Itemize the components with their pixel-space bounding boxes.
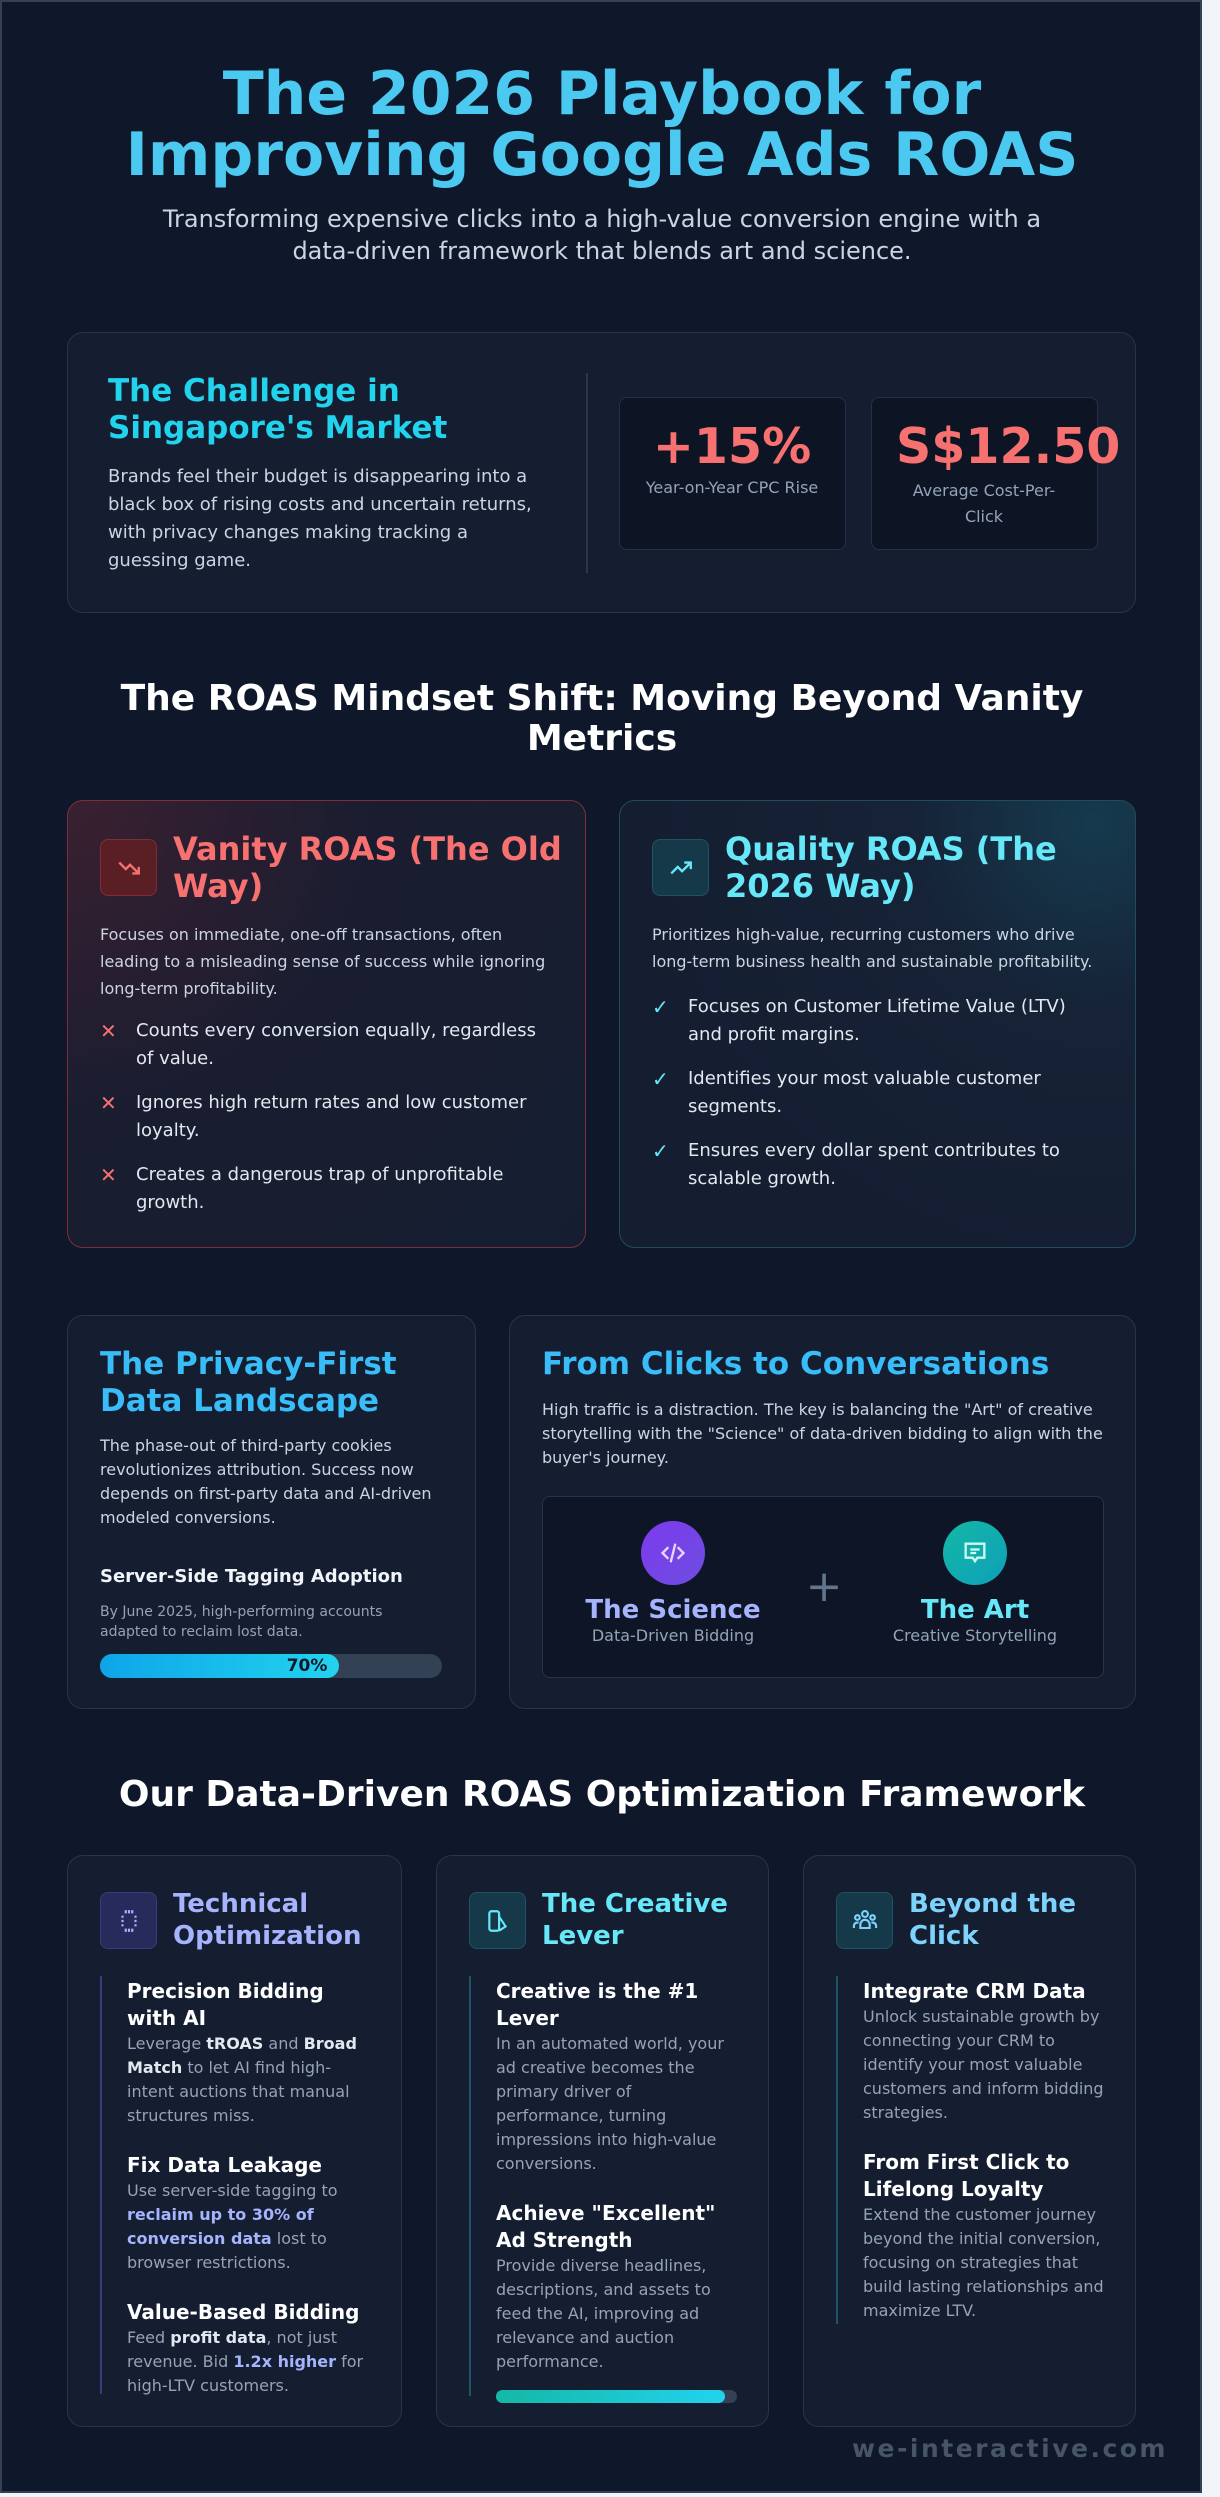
technical items: Feed profit data, not just revenue. Bid 1.2x higher for high-LTV customers. [127,2328,363,2395]
title: The 2026 Playbook for [223,59,981,129]
stat: CPC rise: +15% [653,418,811,475]
quality heading: Quality ROAS (The 2026 Way) [725,830,1057,905]
technical items: Leverage tROAS and Broad Match to let AI find high-intent auctions that manual structures miss. [127,2034,357,2125]
clicks heading: From Clicks to Conversations [542,1346,1049,1382]
quality bullets: Identifies your most valuable customer segments. [688,1068,1041,1117]
panel: beyond the click [803,1855,1136,2427]
quality description: Prioritizes high-value, recurring customers who drive long-term business health and sustainable profitability. [652,925,1092,971]
panel: privacy-first data [67,1315,476,1709]
ad strength bar [496,2390,737,2403]
panel: creative lever [436,1855,769,2427]
beyond items: Extend the customer journey beyond the initial conversion, focusing on strategies that build lasting relationships and maximize LTV. [863,2205,1104,2320]
panel: clicks to conversations [509,1315,1136,1709]
panel: vanity ROAS [67,800,586,1248]
beyond items: Integrate CRM Data [863,1979,1086,2003]
icon: trend up [652,839,709,896]
technical heading: Optimization [173,1921,361,1951]
section heading: framework: Our Data-Driven ROAS Optimization Framework [119,1774,1085,1815]
creative heading [542,1889,728,1951]
section heading: mindset shift [120,678,1083,759]
creative heading: The Creative [542,1889,728,1919]
beyond heading [909,1889,1076,1951]
section heading: mindset shift: The ROAS Mindset Shift: Moving Beyond Vanity [121,678,1083,719]
vanity description: Focuses on immediate, one-off transactions, often leading to a misleading sense of success while ignoring long-term profitability. [100,925,545,998]
science [585,1521,761,1645]
server-side tagging heading: Server-Side Tagging Adoption [100,1566,403,1587]
footer brand: we-interactive.com [852,2434,1168,2463]
icon: people [836,1892,893,1949]
privacy heading: The Privacy-First [100,1346,397,1382]
icon: creative [469,1892,526,1949]
icon: trend down [100,839,157,896]
quality bullets: ✓ [652,1067,669,1091]
vanity bullets: Creates a dangerous trap of unprofitable growth. [136,1164,503,1213]
subtitle: Transforming expensive clicks into a high-value conversion engine with a [163,205,1041,233]
technical items: Value-Based Bidding [127,2300,359,2324]
creative items: Provide diverse headlines, descriptions, and assets to feed the AI, improving ad relevance and auction performance. [496,2256,711,2371]
panel: technical optimization [67,1855,402,2427]
challenge heading: The Challenge in [108,373,400,409]
technical items: Use server-side tagging to reclaim up to 30% of conversion data lost to browser restrictions. [127,2181,338,2272]
science: Data-Driven Bidding [592,1626,754,1645]
quality bullets [652,995,1066,1189]
vanity bullets: ✕ [100,1019,117,1043]
progress bar 70%: 70% [287,1656,327,1676]
server-side note: By June 2025, high-performing accounts adapted to reclaim lost data. [100,1604,382,1640]
icon: code [641,1521,705,1585]
icon: chip [100,1892,157,1949]
panel: challenge [67,332,1136,613]
title: Improving Google Ads ROAS [126,120,1078,190]
technical items: Fix Data Leakage [127,2153,322,2177]
technical heading: Technical [173,1889,308,1919]
section heading: mindset shift: Metrics [527,718,677,759]
quality bullets: Focuses on Customer Lifetime Value (LTV) and profit margins. [688,996,1066,1045]
clicks text: High traffic is a distraction. The key is balancing the "Art" of creative storytelling with the "Science" of data-driven bidding to align with the buyer's journey. [542,1400,1103,1467]
stat: CPC rise: Year-on-Year CPC Rise [646,478,818,497]
stat: average CPC: Average Cost-Per-Click [913,481,1055,526]
beyond items: From First Click to Lifelong Loyalty [863,2150,1069,2201]
beyond heading: Click [909,1921,979,1951]
title [126,59,1078,190]
vanity bullets: ✕ [100,1091,117,1115]
stat: average CPC [871,397,1098,550]
vanity bullets: ✕ [100,1163,117,1187]
panel: quality ROAS [619,800,1136,1248]
privacy text: The phase-out of third-party cookies revolutionizes attribution. Success now depends on first-party data and AI-driven modeled conversions. [100,1436,432,1527]
science: The Science [585,1595,761,1625]
creative items: In an automated world, your ad creative becomes the primary driver of performance, turning impressions into high-value conversions. [496,2034,724,2173]
challenge text: Brands feel their budget is disappearing into a black box of rising costs and uncertain returns, with privacy changes making tracking a guessing game. [108,466,532,571]
stat: CPC rise [619,397,846,550]
quality bullets: ✓ [652,995,669,1019]
technical items: Precision Bidding with AI [127,1979,324,2030]
creative items: Creative is the #1 Lever [496,1979,698,2030]
stat: average CPC: S$12.50 [896,418,1120,475]
technical items [100,1976,370,2394]
plus sign: + [806,1561,842,1612]
art: The Art [921,1595,1029,1625]
technical heading [173,1889,361,1951]
vanity heading: Vanity ROAS (The Old Way) [173,830,562,905]
creative items [469,1976,731,2396]
subtitle: data-driven framework that blends art and science. [292,237,912,265]
quality bullets: ✓ [652,1139,669,1163]
beyond items: Unlock sustainable growth by connecting your CRM to identify your most valuable customers and inform bidding strategies. [863,2007,1104,2122]
icon: chat [943,1521,1007,1585]
challenge heading: Singapore's Market [108,410,447,446]
beyond items [836,1976,1108,2324]
subtitle [162,205,1041,265]
art: Creative Storytelling [893,1626,1057,1645]
beyond heading: Beyond the [909,1889,1076,1919]
vanity bullets [100,1019,536,1213]
progress bar 70% [100,1654,442,1678]
art [893,1521,1057,1645]
privacy heading [100,1346,397,1419]
challenge heading [108,373,447,446]
vanity bullets: Ignores high return rates and low customer loyalty. [136,1092,527,1141]
creative heading: Lever [542,1921,624,1951]
quality bullets: Ensures every dollar spent contributes to scalable growth. [688,1140,1060,1189]
vanity bullets: Counts every conversion equally, regardless of value. [136,1020,536,1069]
creative items: Achieve "Excellent" Ad Strength [496,2201,715,2252]
privacy heading: Data Landscape [100,1383,379,1419]
science + art box [542,1496,1104,1678]
